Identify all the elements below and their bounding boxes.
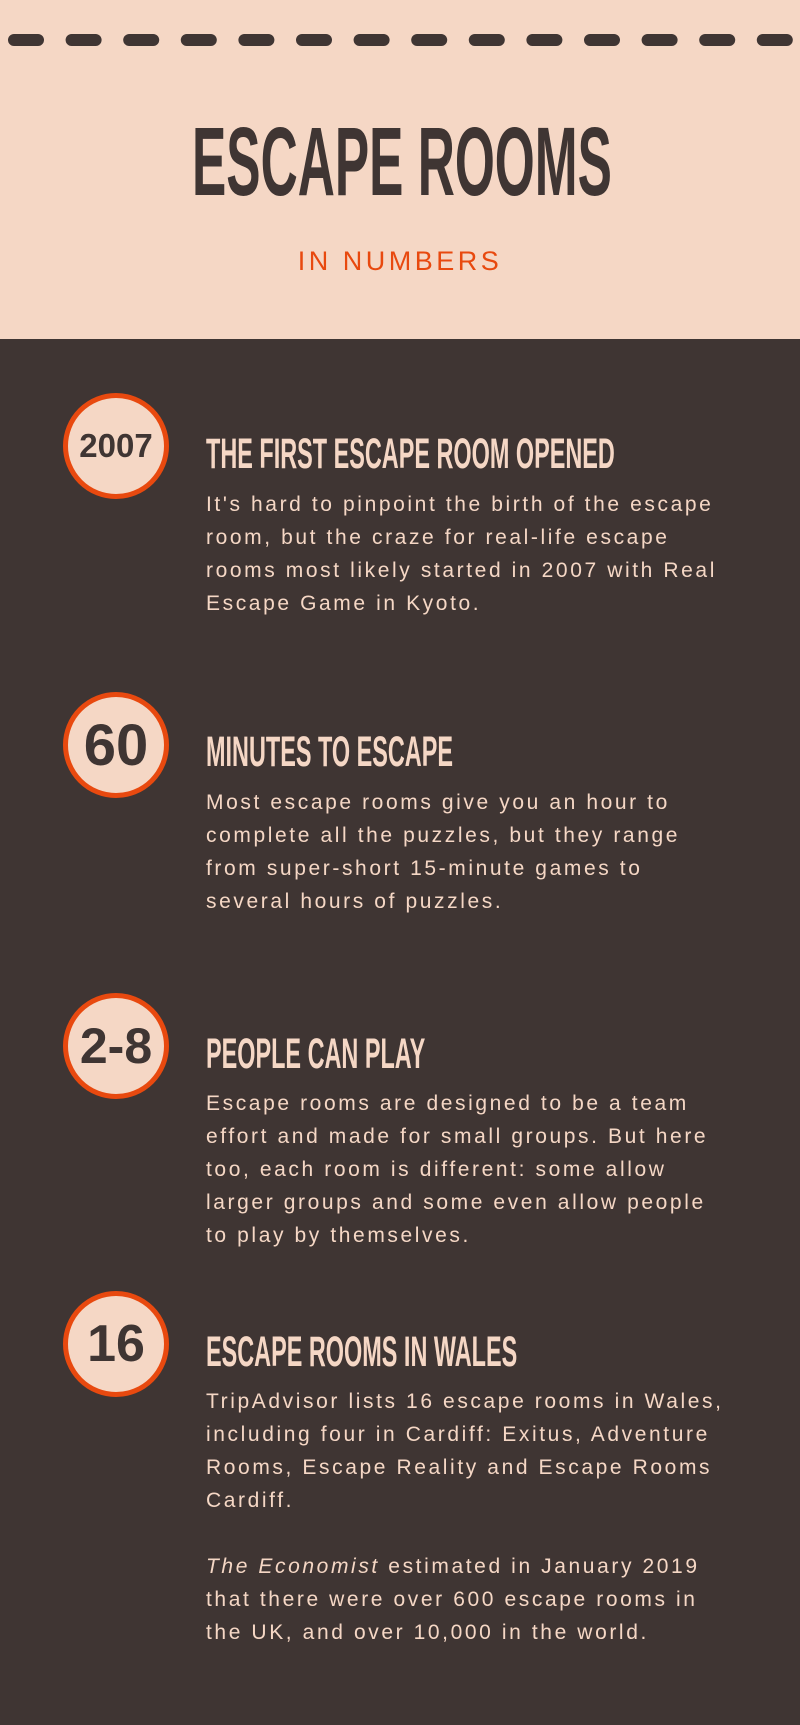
text 1	[206, 493, 717, 615]
heading 4: ESCAPE ROOMS IN WALES	[206, 1328, 517, 1376]
text 1: room, but the craze for real-life escape	[206, 526, 670, 549]
dashed line	[8, 34, 793, 46]
circle: 2007: 2007	[79, 427, 153, 464]
circle: 60	[63, 692, 169, 798]
text 3: larger groups and some even allow people	[206, 1191, 706, 1214]
text 3: to play by themselves.	[206, 1224, 471, 1247]
subtitle: IN NUMBERS	[298, 246, 502, 276]
text 4: the UK, and over 10,000 in the world.	[206, 1621, 649, 1644]
heading 1: THE FIRST ESCAPE ROOM OPENED	[206, 430, 615, 478]
circle: 2-8	[63, 993, 169, 1099]
text 4	[206, 1390, 724, 1644]
circle: 2-8: 2-8	[80, 1018, 152, 1074]
text 4: Cardiff.	[206, 1489, 294, 1512]
heading 2: MINUTES TO ESCAPE	[206, 728, 453, 776]
circle: 60: 60	[84, 712, 148, 778]
text 4: Rooms, Escape Reality and Escape Rooms	[206, 1456, 712, 1479]
text 2: complete all the puzzles, but they range	[206, 824, 680, 847]
text 3: Escape rooms are designed to be a team	[206, 1092, 689, 1115]
text 4: TripAdvisor lists 16 escape rooms in Wales,	[206, 1390, 724, 1413]
text 4: The Economist estimated in January 2019	[206, 1555, 700, 1578]
header panel	[0, 0, 800, 339]
circle: 16: 16	[87, 1315, 145, 1373]
circle: 2007	[63, 393, 169, 499]
text 1: rooms most likely started in 2007 with Real	[206, 559, 717, 582]
circle: 16	[63, 1291, 169, 1397]
text 2	[206, 791, 680, 913]
text 1: It's hard to pinpoint the birth of the escape	[206, 493, 713, 516]
text 4: including four in Cardiff: Exitus, Adventure	[206, 1423, 710, 1446]
text 4: that there were over 600 escape rooms in	[206, 1588, 698, 1611]
text 2: from super-short 15-minute games to	[206, 857, 642, 880]
text 3: effort and made for small groups. But here	[206, 1125, 708, 1148]
heading 3: PEOPLE CAN PLAY	[206, 1030, 425, 1078]
text 1: Escape Game in Kyoto.	[206, 592, 481, 615]
text 3: too, each room is different: some allow	[206, 1158, 667, 1181]
text 3	[206, 1092, 708, 1247]
title: ESCAPE ROOMS	[192, 107, 612, 216]
text 2: several hours of puzzles.	[206, 890, 503, 913]
text 2: Most escape rooms give you an hour to	[206, 791, 670, 814]
